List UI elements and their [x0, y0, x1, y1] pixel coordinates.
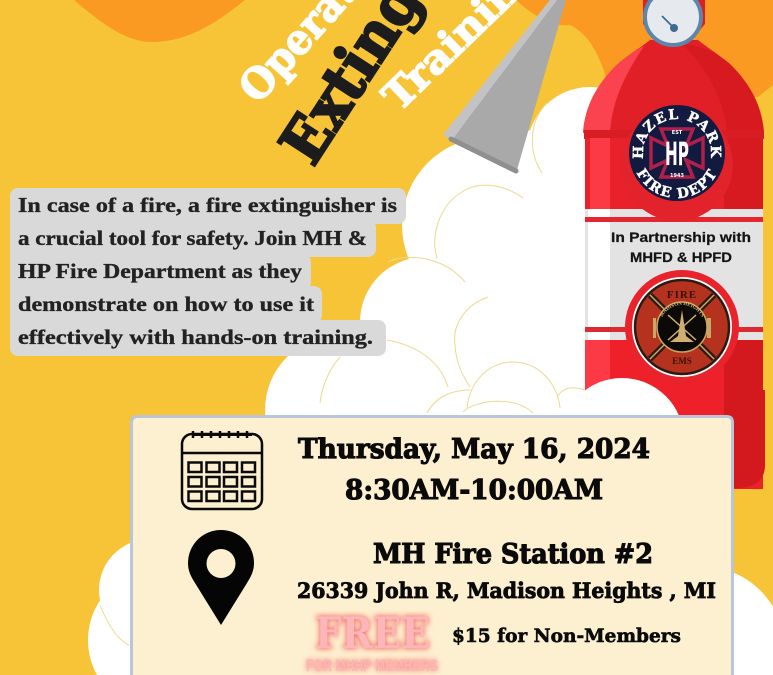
free callout	[306, 609, 438, 675]
dome	[583, 40, 764, 133]
label panel	[585, 209, 763, 340]
neck	[643, 0, 705, 36]
fire extinguisher	[583, 0, 765, 489]
icon: location pin	[188, 530, 254, 625]
intro text block: effectively with hands-on training.	[18, 325, 373, 349]
venue: MH Fire Station #2	[373, 539, 653, 570]
address: 26339 John R, Madison Heights , MI	[297, 578, 716, 603]
badge: Madison Heights Fire Department	[625, 270, 739, 377]
partnership text: MHFD & HPFD	[630, 249, 732, 265]
title	[229, 0, 550, 176]
nozzle	[443, 0, 566, 171]
intro text block: In case of a fire, a fire extinguisher is	[18, 193, 397, 217]
lower body	[585, 340, 763, 489]
badge: Madison Heights Fire Department: MADISON HEIGHTS	[660, 302, 704, 318]
date: Thursday, May 16, 2024	[298, 434, 650, 465]
intro text block: HP Fire Department as they	[18, 259, 303, 283]
intro text block: demonstrate on how to use it	[18, 292, 314, 316]
price for non-members: $15 for Non-Members	[452, 625, 681, 647]
badge: Madison Heights Fire Department: EMS	[672, 356, 692, 366]
info card	[132, 416, 732, 675]
free callout: FREE	[315, 609, 430, 659]
free callout: FOR MHHP MEMBERS	[306, 656, 438, 675]
icon: calendar	[182, 431, 262, 509]
cloud lobe over extinguisher	[560, 378, 684, 502]
partnership text: In Partnership with	[611, 229, 751, 245]
badge: Hazel Park Fire Dept	[628, 105, 733, 217]
time: 8:30AM-10:00AM	[345, 475, 603, 506]
free callout: FREE	[315, 609, 430, 659]
intro text block	[10, 188, 406, 356]
badge: Hazel Park Fire Dept: HAZEL PARK	[632, 108, 722, 159]
intro text block: a crucial tool for safety. Join MH &	[18, 226, 367, 250]
badge: Hazel Park Fire Dept: HP	[665, 135, 689, 173]
badge: Hazel Park Fire Dept: 1943	[670, 173, 684, 179]
badge: Madison Heights Fire Department: FIRE	[667, 289, 697, 301]
free callout: FOR MHHP MEMBERS	[306, 656, 438, 675]
gauge	[645, 0, 701, 45]
smoke cloud	[88, 87, 773, 675]
badge: Hazel Park Fire Dept: EST	[672, 130, 683, 136]
shoulder band	[584, 130, 764, 139]
partnership text	[611, 229, 751, 265]
badge: Hazel Park Fire Dept: FIRE DEPT	[636, 167, 716, 199]
orange blob left	[74, 0, 245, 42]
upper body	[585, 138, 763, 210]
orange blob right	[516, 0, 773, 97]
